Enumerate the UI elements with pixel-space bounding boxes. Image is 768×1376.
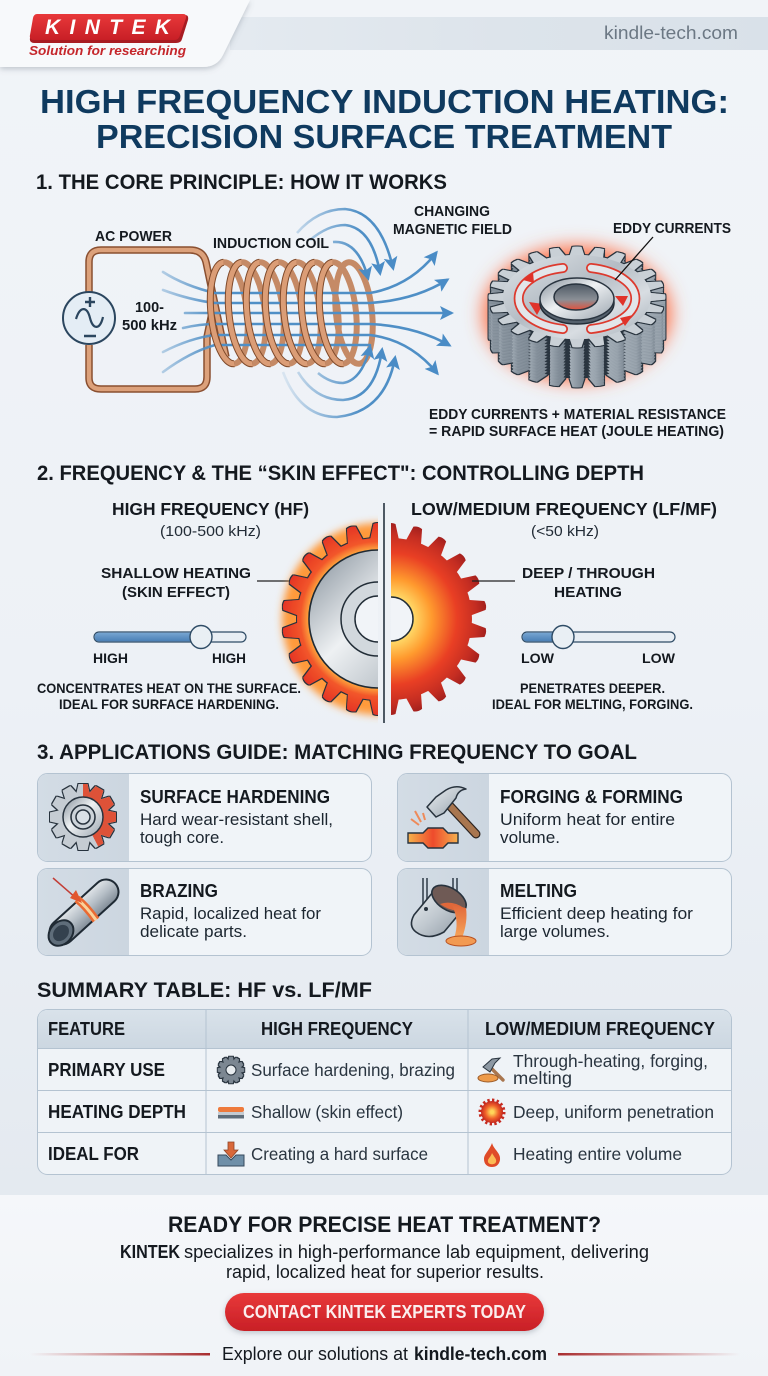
logo panel xyxy=(0,0,250,67)
card: surface hardening: Hard wear-resistant shell, xyxy=(140,810,333,829)
icon: gear xyxy=(50,784,116,850)
panel: induction coil diagram: 500 kHz xyxy=(122,317,177,334)
icon: gear cross-section with deep heating xyxy=(391,523,486,715)
panel: high frequency column xyxy=(37,499,309,712)
table header: LOW/MEDIUM FREQUENCY xyxy=(485,1019,715,1039)
caption: joule heating: = RAPID SURFACE HEAT (JOULE HEATING) xyxy=(429,423,724,440)
icon: gear cross-section with shallow heating xyxy=(275,516,378,722)
header band with website: kindle-tech.com xyxy=(604,23,738,43)
call to action button xyxy=(225,1293,544,1331)
panel: low/medium frequency column: (<50 kHz) xyxy=(531,523,599,540)
card: forging and forming xyxy=(398,774,732,862)
slider: high xyxy=(94,626,246,648)
panel: high frequency column: (SKIN EFFECT) xyxy=(122,584,230,601)
panel: high frequency column: (100-500 kHz) xyxy=(160,523,261,540)
row: ideal for: Heating entire volume xyxy=(513,1144,682,1164)
footer link line xyxy=(30,1344,740,1364)
title xyxy=(40,83,729,155)
panel: induction coil diagram: 100- xyxy=(135,299,164,316)
leader line and label xyxy=(615,237,653,280)
footer description: rapid, localized heat for superior results. xyxy=(226,1262,544,1282)
panel: high frequency column: HIGH FREQUENCY (HF) xyxy=(112,499,309,519)
panel: induction coil diagram: INDUCTION COIL xyxy=(213,235,329,252)
divider xyxy=(383,503,385,723)
gear sides xyxy=(488,249,666,387)
footer description: KINTEK xyxy=(120,1242,180,1262)
table header: HIGH FREQUENCY xyxy=(261,1019,413,1039)
logo panel: KINTEK xyxy=(45,16,172,39)
panel: high frequency column: HIGH xyxy=(212,650,246,666)
gear top face xyxy=(488,247,666,347)
panel: high frequency column: IDEAL FOR SURFACE HARDENING. xyxy=(59,696,279,712)
panel: low/medium frequency column: PENETRATES DEEPER. xyxy=(520,680,665,696)
call to action button: CONTACT KINTEK EXPERTS TODAY xyxy=(243,1302,526,1322)
row: primary use xyxy=(48,1051,708,1088)
row: ideal for: Creating a hard surface xyxy=(251,1144,428,1164)
row: heating depth: HEATING DEPTH xyxy=(48,1102,186,1122)
row: primary use: PRIMARY USE xyxy=(48,1060,165,1080)
hub and bore xyxy=(540,278,614,324)
card: surface hardening: tough core. xyxy=(140,828,224,847)
coil back strands xyxy=(206,260,377,366)
card: surface hardening xyxy=(38,774,372,862)
logo panel: Solution for researching xyxy=(29,43,186,58)
panel: low/medium frequency column: DEEP / THROUGH xyxy=(522,565,655,582)
panel: low/medium frequency column: LOW xyxy=(642,650,676,666)
row: heating depth: Deep, uniform penetration xyxy=(513,1102,714,1122)
footer panel xyxy=(0,1195,768,1376)
card: forging and forming: Uniform heat for entire xyxy=(500,810,675,829)
footer description: specializes in high-performance lab equipment, delivering xyxy=(184,1242,649,1262)
card: forging and forming: FORGING & FORMING xyxy=(500,787,683,807)
table header xyxy=(48,1019,715,1039)
icon: crucible pouring xyxy=(411,878,476,946)
icon: burst xyxy=(480,1100,504,1124)
panel: low/medium frequency column: IDEAL FOR MELTING, FORGING. xyxy=(492,696,693,712)
header band with website xyxy=(230,17,768,50)
card: melting xyxy=(398,868,732,956)
title: PRECISION SURFACE TREATMENT xyxy=(96,118,672,155)
eddy current loops xyxy=(519,268,635,329)
panel: low/medium frequency column xyxy=(411,499,717,712)
table header: FEATURE xyxy=(48,1019,125,1039)
row: ideal for xyxy=(48,1142,682,1167)
row: primary use: Through-heating, forging, xyxy=(513,1051,708,1071)
panel: low/medium frequency column: HEATING xyxy=(554,584,622,601)
icon: AC power source xyxy=(63,292,115,344)
panel: low/medium frequency column: LOW/MEDIUM FREQUENCY (LF/MF) xyxy=(411,499,717,519)
panel: high frequency column: HIGH xyxy=(93,650,128,666)
row: heating depth: Shallow (skin effect) xyxy=(251,1102,403,1122)
summary heading: SUMMARY TABLE: HF vs. LF/MF xyxy=(37,978,372,1002)
panel: high frequency column: SHALLOW HEATING xyxy=(101,565,251,582)
panel: heated gear with eddy currents xyxy=(483,220,731,387)
copper wire circuit xyxy=(89,250,226,389)
footer heading: READY FOR PRECISE HEAT TREATMENT? xyxy=(168,1212,601,1237)
card: melting: Efficient deep heating for xyxy=(500,904,693,923)
icon: hammer and hot billet xyxy=(408,787,476,848)
card: brazing: delicate parts. xyxy=(140,922,247,941)
footer description xyxy=(120,1242,649,1282)
summary table xyxy=(38,1010,732,1174)
footer link line: kindle-tech.com xyxy=(414,1344,547,1364)
section heading 3: 3. APPLICATIONS GUIDE: MATCHING FREQUENCY TO GOAL xyxy=(37,740,637,764)
return flux arcs xyxy=(283,209,395,417)
panel: heated gear with eddy currents: EDDY CURRENTS xyxy=(613,220,731,237)
card: brazing: Rapid, localized heat for xyxy=(140,904,321,923)
magnetic field lines through coil xyxy=(163,253,451,373)
panel: high frequency column: CONCENTRATES HEAT ON THE SURFACE. xyxy=(37,680,301,696)
icon: small gear xyxy=(218,1057,244,1083)
coil front strands xyxy=(206,262,343,366)
current arrowheads xyxy=(523,272,633,326)
card: surface hardening: SURFACE HARDENING xyxy=(140,787,330,807)
panel: induction coil diagram: MAGNETIC FIELD xyxy=(393,221,512,238)
footer link line: Explore our solutions at xyxy=(222,1344,408,1364)
panel: induction coil diagram xyxy=(63,203,512,417)
caption: joule heating: EDDY CURRENTS + MATERIAL RESISTANCE xyxy=(429,406,726,423)
row: primary use: Surface hardening, brazing xyxy=(251,1060,455,1080)
icon: surface layers xyxy=(218,1107,244,1118)
icon: flame xyxy=(484,1143,500,1167)
card: brazing xyxy=(38,868,372,956)
card: brazing: BRAZING xyxy=(140,881,218,901)
panel: low/medium frequency column: LOW xyxy=(521,650,555,666)
slider: low xyxy=(522,626,675,648)
title: HIGH FREQUENCY INDUCTION HEATING: xyxy=(40,83,729,120)
icon: brazed pipe xyxy=(43,878,106,951)
icon: hardening arrow xyxy=(218,1142,244,1166)
row: primary use: melting xyxy=(513,1068,572,1088)
card: melting: MELTING xyxy=(500,881,577,901)
caption: joule heating xyxy=(429,406,726,440)
section heading 2: 2. FREQUENCY & THE “SKIN EFFECT": CONTROLLING DEPTH xyxy=(37,461,644,485)
card: forging and forming: volume. xyxy=(500,828,560,847)
card: melting: large volumes. xyxy=(500,922,610,941)
section heading 1: 1. THE CORE PRINCIPLE: HOW IT WORKS xyxy=(36,170,447,194)
icon: small hammer xyxy=(478,1058,503,1082)
row: heating depth xyxy=(48,1100,714,1124)
labels: AC POWER xyxy=(95,228,172,245)
row: ideal for: IDEAL FOR xyxy=(48,1144,139,1164)
panel: induction coil diagram: CHANGING xyxy=(414,203,490,220)
